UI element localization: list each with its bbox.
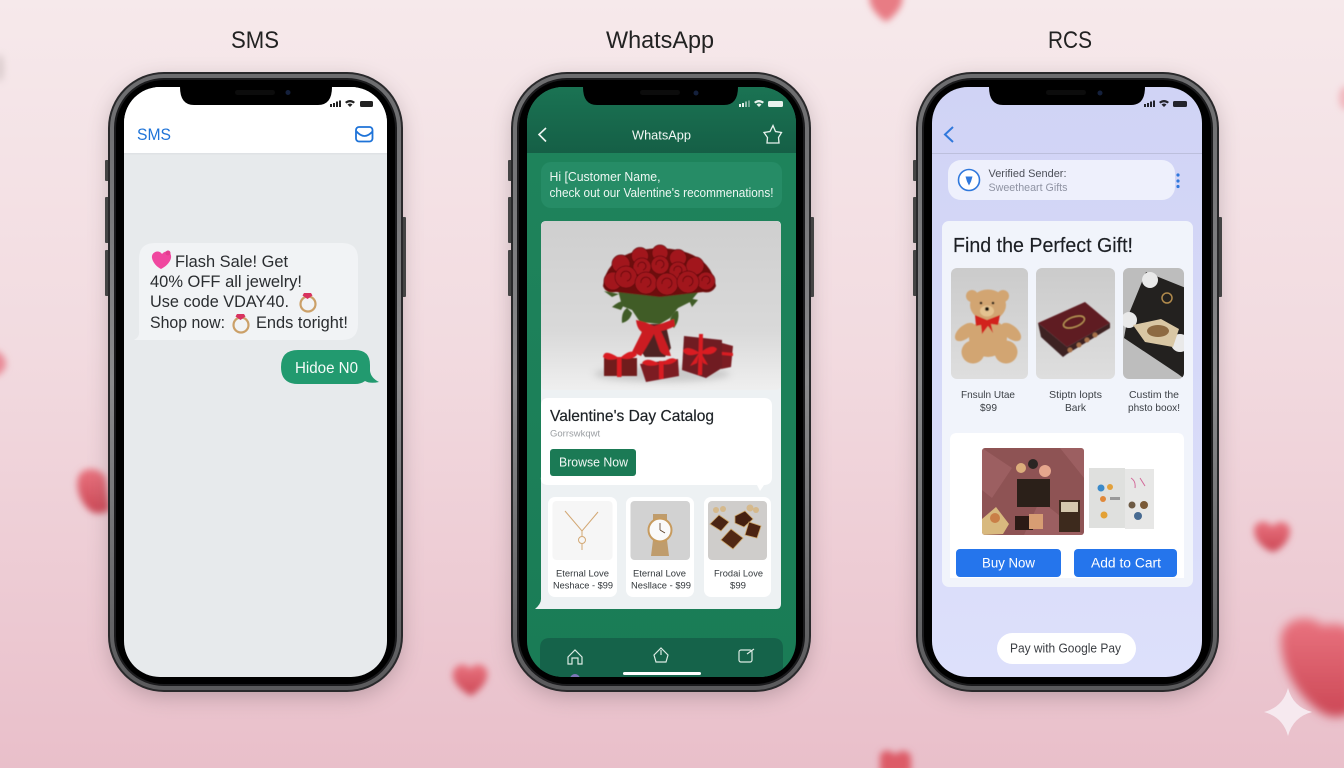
card subtitle: Gorrswkqwt	[550, 428, 601, 440]
button: Buy Now	[956, 549, 1061, 577]
incoming message bubble	[134, 243, 358, 340]
catalog message card	[535, 221, 781, 609]
product: chocolate box	[1036, 268, 1115, 379]
heading: WhatsApp: WhatsApp	[606, 27, 714, 54]
verified sender pill: Verified Sender:	[988, 168, 1066, 180]
verified sender pill: Sweetheart Gifts	[988, 182, 1068, 194]
status icons	[739, 100, 783, 107]
incoming message bubble: Flash Sale! Get	[175, 252, 288, 271]
back arrow	[945, 127, 953, 142]
booklet image	[1089, 468, 1154, 529]
card title: Valentine's Day Catalog	[550, 408, 714, 425]
phone: WhatsApp	[508, 72, 814, 694]
home indicator	[623, 672, 701, 675]
gift flat lay image	[982, 448, 1084, 535]
product: necklace: Neshace - $99	[553, 580, 613, 592]
icon: mail tray	[356, 127, 372, 142]
product captions: Custim the	[1129, 389, 1179, 401]
leaves	[604, 290, 700, 328]
notch	[989, 87, 1145, 105]
heading: SMS: SMS	[231, 27, 279, 54]
product: photo book	[1121, 268, 1189, 380]
screen: WhatsApp	[527, 87, 796, 684]
screen: RCS	[932, 87, 1202, 677]
screen: SMS	[124, 87, 387, 677]
promotion panel	[950, 433, 1184, 578]
phone: SMS	[105, 72, 406, 694]
product: watch	[626, 497, 694, 597]
icon: share	[654, 648, 668, 662]
gift boxes	[721, 343, 733, 369]
product: chocolates: $99	[730, 580, 746, 592]
button: Browse Now: Browse Now	[559, 456, 629, 470]
icon: ring emoji	[234, 314, 248, 332]
notch	[180, 87, 332, 105]
icon: home	[568, 650, 582, 664]
bottom navigation bar	[540, 638, 783, 677]
outgoing message bubble: Hidoe N0	[295, 360, 358, 377]
product captions: Fnsuln Utae	[961, 389, 1015, 401]
notch	[583, 87, 738, 105]
vase	[638, 324, 671, 357]
icon: pink heart emoji	[152, 250, 171, 269]
ribbon	[632, 319, 675, 356]
product: necklace	[548, 497, 617, 597]
outgoing message bubble	[281, 350, 379, 384]
catalog info card	[541, 398, 772, 491]
greeting message: check out our Valentine's recommenations!	[550, 185, 774, 200]
icon: verified badge	[958, 170, 980, 190]
product captions	[961, 389, 1180, 414]
product captions: Bark	[1065, 402, 1087, 414]
overflow menu dots	[1176, 173, 1180, 188]
product: watch: Eternal Love	[633, 568, 686, 580]
button: Buy Now: Buy Now	[982, 556, 1035, 570]
Google Pay pill	[997, 633, 1136, 664]
incoming message bubble: 40% OFF all jewelry!	[150, 272, 302, 291]
header label: SMS	[137, 125, 171, 144]
product: watch: Nesllace - $99	[631, 580, 691, 592]
header bar	[527, 87, 796, 153]
icon: compose	[739, 649, 754, 662]
header bar	[124, 87, 387, 154]
button: Browse Now	[550, 449, 636, 476]
button: Add to Cart	[1074, 549, 1177, 577]
header title: WhatsApp	[632, 128, 691, 142]
incoming message bubble: Use code VDAY40.	[150, 292, 289, 311]
product: chocolates: Frodai Love	[714, 568, 763, 580]
product captions: $99	[980, 402, 997, 414]
product captions: Stiptn lopts	[1049, 389, 1102, 401]
button: Add to Cart: Add to Cart	[1091, 556, 1161, 570]
icon: star	[764, 126, 782, 143]
product: necklace: Eternal Love	[556, 568, 609, 580]
verified sender pill	[948, 160, 1175, 200]
back arrow	[539, 128, 546, 142]
card title: Find the Perfect Gift!	[953, 235, 1133, 257]
greeting message: Hi [Customer Name,	[550, 169, 660, 184]
rich card	[942, 221, 1193, 587]
status icons	[330, 100, 373, 107]
greeting message	[541, 162, 782, 208]
product: teddy bear	[951, 268, 1028, 379]
product: chocolates	[704, 497, 771, 597]
icon: ring emoji	[300, 293, 316, 312]
sparkle icon	[1264, 688, 1312, 736]
product captions: phsto boox!	[1128, 402, 1180, 414]
product hero image: roses and gifts	[541, 221, 781, 390]
incoming message bubble: Shop now:	[150, 313, 225, 332]
Google Pay pill: Pay with Google Pay	[1010, 642, 1122, 656]
heading: RCS: RCS	[1048, 27, 1092, 54]
incoming message bubble: Ends toright!	[256, 313, 348, 332]
red rose dome	[603, 248, 716, 297]
phone: RCS	[913, 72, 1222, 694]
status icons	[1144, 100, 1187, 107]
